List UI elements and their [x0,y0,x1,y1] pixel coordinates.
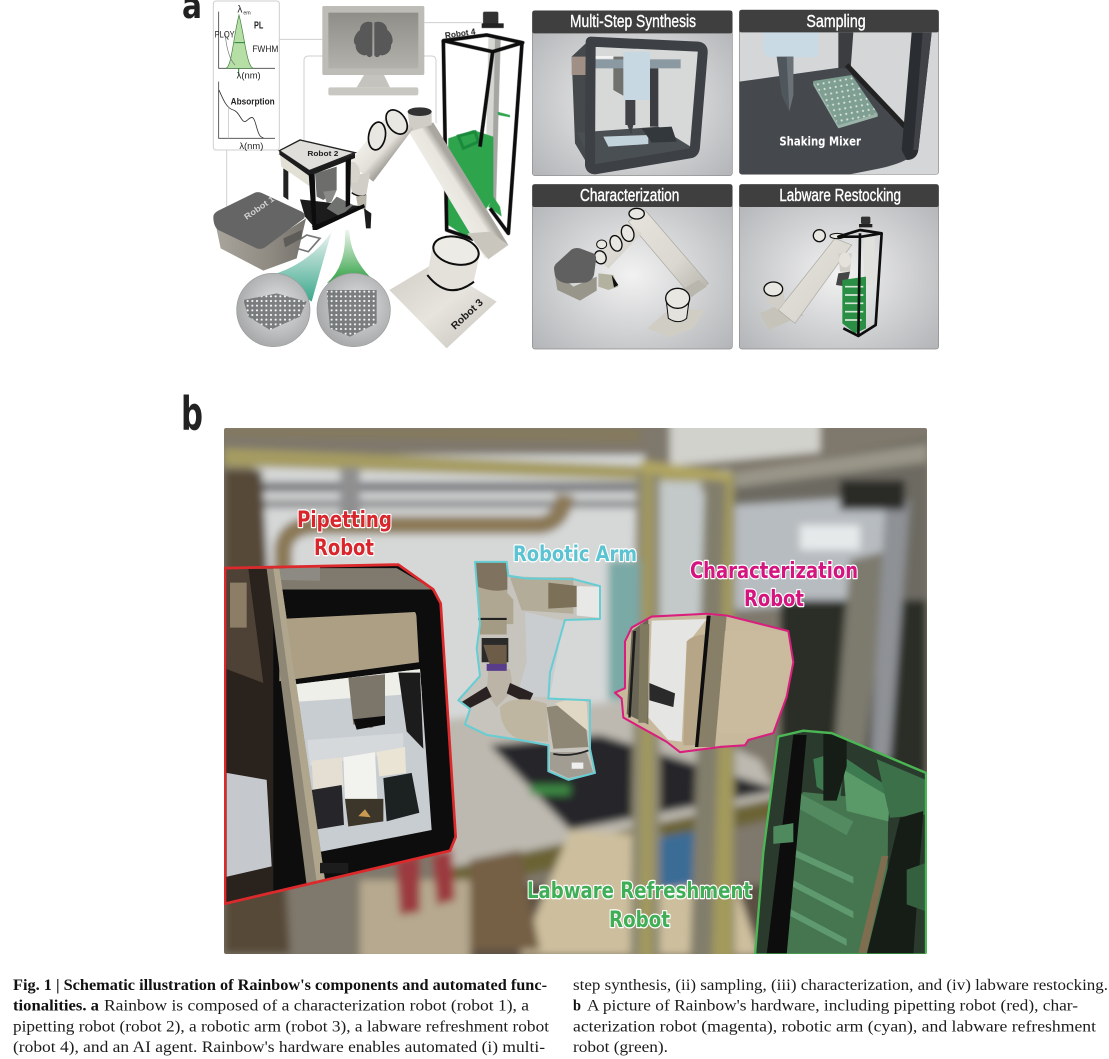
absorption plot [219,82,275,151]
label Shaking Mixer: Shaking Mixer [779,135,861,149]
base plate [389,263,497,348]
characterization robot cutout [615,614,793,752]
long link [407,123,508,258]
caption: right column: robot (green). [573,1039,668,1056]
blurred lab background [215,420,935,965]
caption: left column: Fig. 1 | Schematic illustration of Rainbow's components and automated func- [13,977,547,994]
panel: Sampling [739,10,939,175]
panel: Labware Restocking [739,184,939,349]
absorption plot: Absorption [231,97,275,107]
label: Characterization Robot: Robot [744,586,804,612]
absorption plot: λ(nm) [239,141,263,151]
caption: left column [13,977,550,1056]
well plate [813,75,878,125]
robot 2: pipetting robot [279,140,365,230]
caption: right column: A picture of Rainbow's hardware, including pipetting robot (red), char- [587,998,1078,1014]
PL spectrum plot: em [243,11,251,17]
heading: Labware Restocking [779,185,901,205]
red tags [396,855,420,915]
caption: right column: acterization robot (magenta), robotic arm (cyan), and labware refreshment [573,1018,1097,1036]
label: Pipetting Robot: Robot [314,535,374,561]
panel label b: b [181,387,203,441]
label: Pipetting Robot: Pipetting [297,507,392,533]
PL spectrum plot: λ(nm) [237,71,261,81]
wrist link [348,110,413,182]
caption: right column: step synthesis, (ii) sampling, (iii) characterization, and (iv) labware restocking. [573,977,1108,994]
robot 1: characterization robot [213,192,320,271]
sampling illustration [739,32,932,175]
label: Labware Refreshment Robot: Robot [609,907,670,933]
glass pillars [630,472,660,960]
gripper [356,195,367,210]
label Robot 3: Robot 3 [450,297,486,332]
label Robot 2: Robot 2 [307,149,338,158]
label: Characterization Robot [690,558,858,612]
icon: nanocrystal lattice 2 [317,273,390,347]
label Robot 1: Robot 1 [242,193,277,222]
label: Characterization Robot: Characterization [690,558,858,584]
caption: right column [573,977,1108,1056]
connector lines between AI agent and robots [227,23,482,207]
PL spectrum plot: PL [254,20,263,31]
heading: Multi-Step Synthesis [570,11,696,31]
PL spectrum plot: FWHM [252,44,278,54]
caption: left column: pipetting robot (robot 2), a robotic arm (robot 3), a labware refreshment robot [13,1018,550,1036]
PL spectrum plot: PLQY [215,30,235,40]
label Robot 4: Robot 4 [444,26,476,40]
robot 4: labware refreshment robot [443,12,523,239]
caption: left column: (robot 4), and an AI agent. Rainbow's hardware enables automated (i) multi- [13,1039,545,1056]
base cylinder [427,250,480,292]
label: Labware Refreshment Robot [527,878,752,933]
zoom cones to nanocrystal [272,230,377,302]
labware refreshment robot cutout [753,728,928,956]
cyan outline [458,562,600,780]
icon: nanocrystal lattice 1 [237,273,310,347]
caption: right column: b [573,998,581,1014]
red outline [225,565,456,904]
panel: Characterization [532,184,732,349]
label: Robotic Arm: Robotic Arm [513,542,637,567]
PL spectrum plot [215,5,278,81]
green outline [755,731,926,955]
label: Pipetting Robot [297,507,392,561]
printer illustration [572,39,703,169]
pipetting robot cutout [220,558,460,908]
panel: Multi-Step Synthesis [532,11,732,176]
caption: left column: tionalities. a [13,998,99,1014]
icon: monitor with AI brain [322,6,424,95]
heading: Characterization [580,185,679,205]
upper joint [408,112,432,132]
right upper background [730,438,927,610]
robot 3: robotic arm [345,106,508,348]
arm and labware illustration [760,217,882,336]
magenta outline [615,614,793,752]
spectra card [213,1,279,151]
panel a: system schematic [213,1,523,348]
label: Labware Refreshment Robot: Labware Refreshment [527,878,752,904]
heading: Sampling [806,11,866,31]
panel b: photo of hardware [215,420,935,965]
arm and instrument illustration [554,208,708,337]
caption: left column: Rainbow is composed of a characterization robot (robot 1), a [104,998,529,1014]
lower shelf [447,794,770,883]
icon: brain [354,22,393,57]
robotic arm cutout [458,562,600,780]
panels: four automated functionalities [532,10,939,349]
table surface [440,700,780,880]
PL spectrum plot: λ [237,5,242,16]
teal bottles [608,560,640,700]
